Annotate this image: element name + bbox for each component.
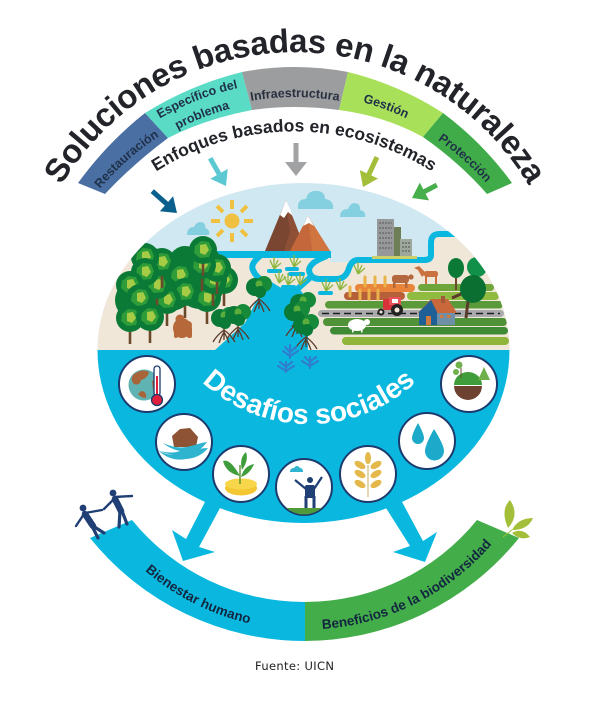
segment: Específico del problema [145, 72, 252, 138]
icon: person wellbeing [276, 459, 332, 516]
clouds [187, 191, 365, 235]
left forest [115, 236, 238, 344]
segment: Bienestar humano [90, 520, 305, 641]
mountains [265, 200, 330, 251]
cow [392, 274, 414, 288]
segment: Específico del problema: problema [175, 103, 230, 132]
icon: wheat [340, 446, 396, 502]
icon: people helping [76, 490, 132, 538]
segment: Beneficios de la biodiversidad [305, 520, 519, 641]
icon: water drops [399, 413, 455, 469]
orange crop strips [344, 277, 415, 300]
segment: Gestión: Gestión [364, 94, 408, 118]
wetland pads and reeds [250, 255, 365, 295]
orangutan [173, 314, 192, 338]
coral [278, 345, 318, 372]
segment: Bienestar humano: Bienestar humano [146, 564, 250, 623]
river [252, 234, 456, 292]
segment: Protección [423, 113, 512, 194]
right trees [448, 257, 487, 318]
sky [95, 180, 515, 352]
arrow: dark blue [146, 184, 184, 221]
mangroves [211, 276, 319, 350]
arrows to outcomes [172, 500, 437, 562]
arrow: to human wellbeing [172, 500, 220, 561]
title: Soluciones basadas en la naturaleza [46, 28, 540, 186]
arrow: gray [285, 143, 307, 176]
arrow: olive [354, 153, 386, 191]
horse [414, 266, 438, 284]
segment: Beneficios de la biodiversidad: Beneficios de la biodiversidad [322, 538, 492, 629]
approach arc band [78, 67, 512, 194]
land [95, 236, 515, 350]
arrow: to biodiversity [386, 500, 437, 562]
icon: soil and land [441, 356, 497, 412]
main river channel [215, 287, 308, 350]
tractor [378, 297, 403, 316]
segment: Restauración: Restauración [94, 132, 158, 188]
upper water band [213, 251, 331, 258]
landscape [95, 180, 515, 352]
outcome band [90, 520, 519, 641]
sun [211, 200, 253, 242]
heading: Desafíos sociales: Desafíos sociales [203, 368, 414, 424]
icon: flood [156, 414, 212, 470]
sheep [348, 319, 370, 332]
segment: Infraestructura: Infraestructura [250, 88, 340, 101]
buildings [372, 219, 417, 259]
arrow: teal [201, 153, 235, 191]
lower hemisphere: societal challenges [98, 349, 510, 523]
segment: Específico del problema: Específico del [156, 80, 237, 118]
arrow: green [407, 176, 441, 207]
house [418, 296, 457, 325]
icon: climate change [119, 356, 175, 412]
source caption: Fuente: UICN [255, 659, 334, 673]
road [318, 310, 504, 317]
field strips [323, 284, 509, 345]
segment: Gestión [339, 72, 443, 137]
icon: economic plant [213, 446, 269, 502]
subtitle: Enfoques basados en ecosistemas: Enfoques basados en ecosistemas [150, 119, 435, 171]
segment: Restauración [78, 113, 168, 194]
icon: leaves [503, 500, 533, 538]
segment: Infraestructura [242, 67, 348, 110]
segment: Protección: Protección [438, 133, 490, 182]
